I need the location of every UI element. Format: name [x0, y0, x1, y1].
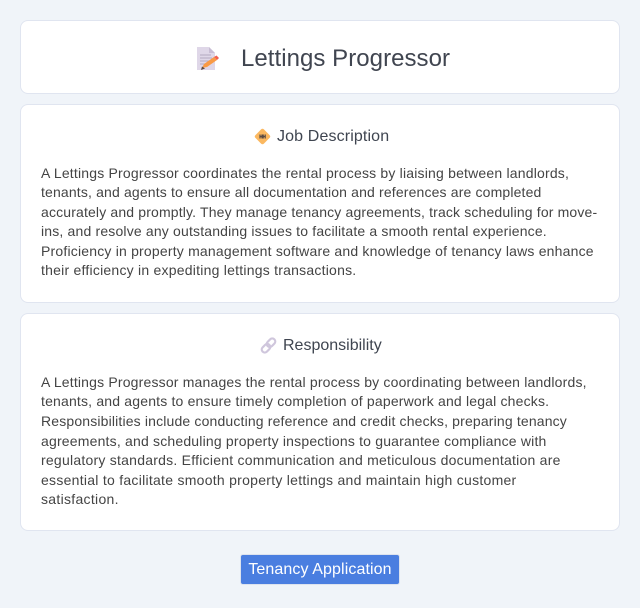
- icon: document with pencil: [197, 47, 219, 70]
- button: Tenancy Application: [240, 554, 400, 585]
- text: job description body: tenants, and agents to ensure all documentation and references are completed: [41, 184, 541, 200]
- text: job description body: accurately and promptly. They manage tenancy agreements, track scheduling for move-: [41, 204, 597, 220]
- text: job description body: A Lettings Progressor coordinates the rental process by liaising between landlords,: [41, 165, 569, 181]
- panel: title: [20, 20, 620, 94]
- text: responsibility body: regulatory standards. Efficient communication and meticulous documentation are: [41, 452, 561, 468]
- text: responsibility body: A Lettings Progressor manages the rental process by coordinating between landlords,: [41, 374, 587, 390]
- text: responsibility body: satisfaction.: [41, 491, 119, 507]
- icon: chain link: [260, 337, 276, 354]
- text: job description body: their efficiency in expediting lettings transactions.: [41, 262, 356, 278]
- panel: job description: [20, 104, 620, 303]
- text: responsibility body: agreements, and scheduling property inspections to guarantee compliance with: [41, 433, 547, 449]
- icon: diamond sign: [254, 128, 270, 144]
- heading: Responsibility: Responsibility: [283, 337, 382, 354]
- panel: responsibility: [20, 313, 620, 531]
- text: responsibility body: [41, 374, 587, 507]
- text: responsibility body: essential to facilitate smooth property lettings and maintain high customer: [41, 472, 516, 488]
- text: job description body: Proficiency in property management software and knowledge of tenancy laws enhance: [41, 243, 594, 259]
- text: job description body: ins, and resolve any outstanding issues to facilitate a smooth rental experience.: [41, 223, 547, 239]
- text: responsibility body: tenants, and agents to ensure timely completion of paperwork and legal checks.: [41, 393, 549, 409]
- heading: Job Description: Job Description: [277, 128, 389, 145]
- button: Tenancy Application: Tenancy Application: [248, 561, 392, 578]
- text: responsibility body: Responsibilities include conducting reference and credit checks, preparing tenancy: [41, 413, 567, 429]
- heading: Lettings Progressor: Lettings Progressor: [241, 45, 450, 72]
- text: job description body: [41, 165, 597, 278]
